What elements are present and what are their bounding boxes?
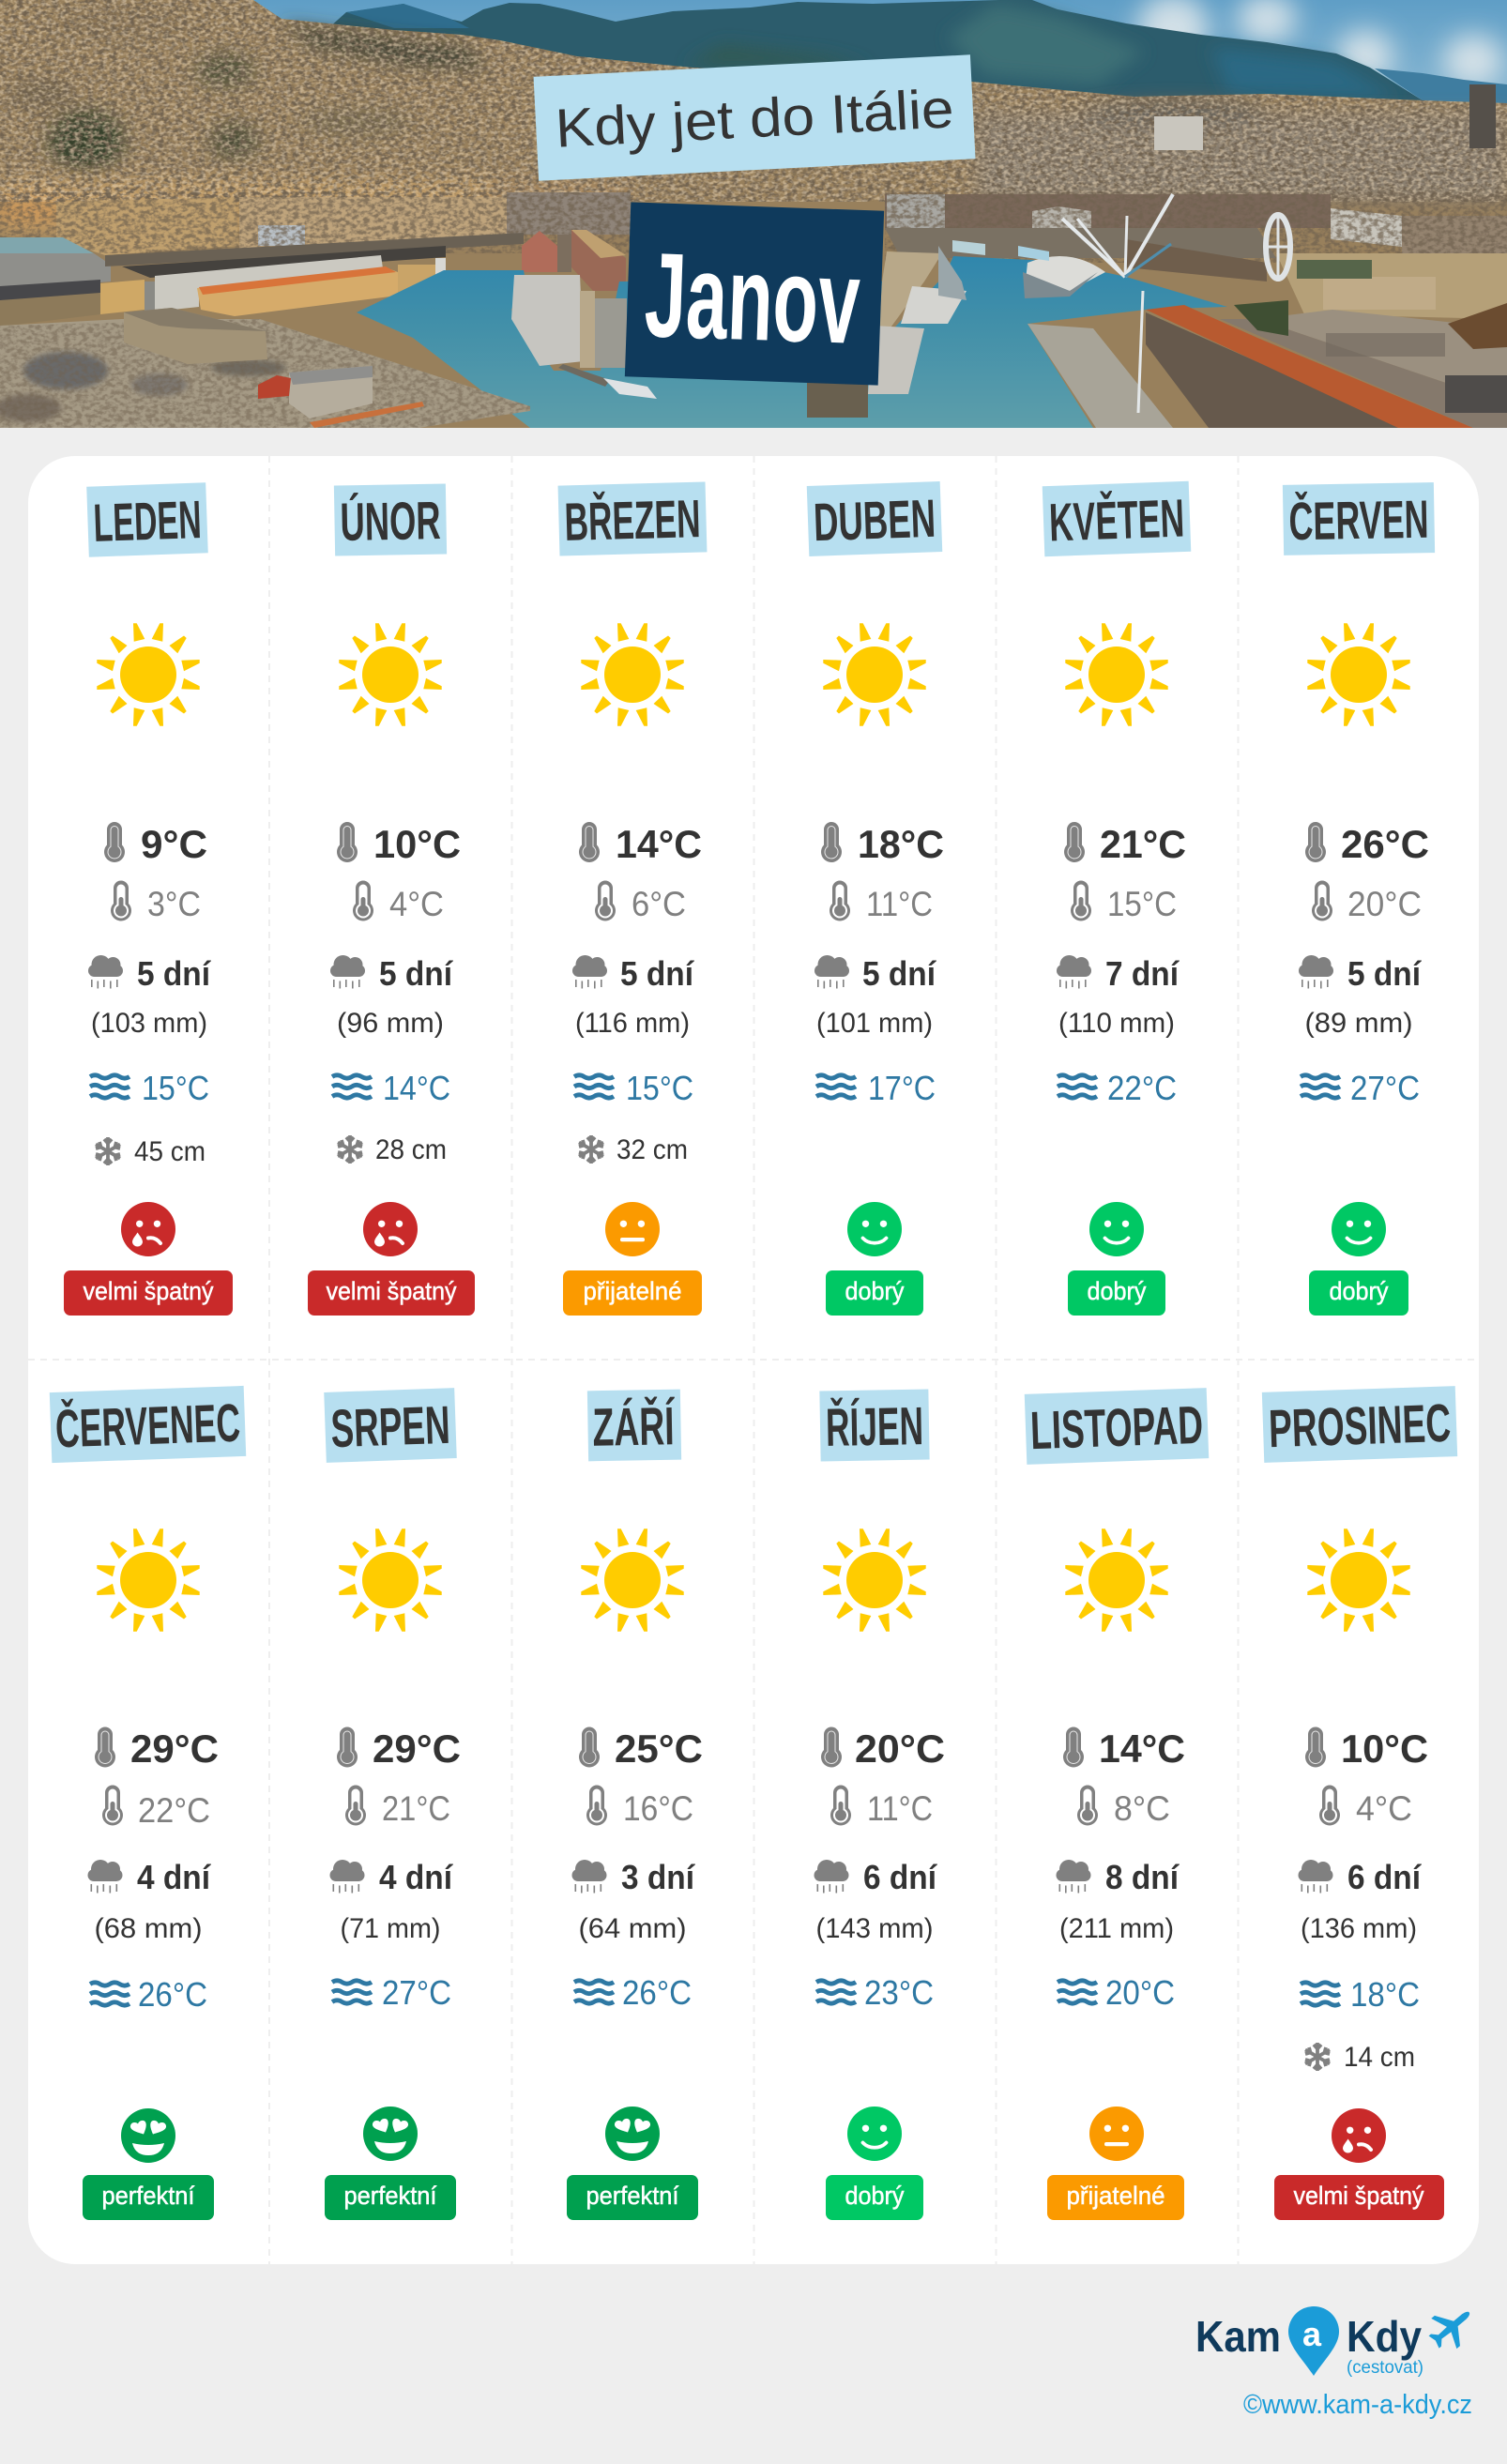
sea temperature: 26°C bbox=[622, 1973, 692, 2012]
panel: ČERVENEC bbox=[50, 1386, 246, 2220]
icon: max thermometer bbox=[1305, 1726, 1326, 1768]
rainfall: (136 mm) bbox=[1301, 1913, 1417, 1944]
rating badge bbox=[1309, 1270, 1408, 1316]
icon: sun bbox=[823, 1529, 926, 1632]
min temperature: 16°C bbox=[623, 1789, 693, 1828]
month heading: ÚNOR bbox=[340, 491, 441, 553]
sea temperature: 22°C bbox=[1107, 1069, 1177, 1107]
snow depth: 45 cm bbox=[134, 1136, 206, 1167]
rating badge: dobrý bbox=[1087, 1277, 1147, 1305]
icon: rain cloud bbox=[814, 955, 849, 989]
city texture bbox=[0, 0, 1507, 202]
rain days: 4 dní bbox=[137, 1858, 211, 1896]
icon: sea waves bbox=[1301, 1983, 1340, 2005]
panel: BŘEZEN bbox=[558, 481, 707, 1316]
icon: max thermometer bbox=[1064, 822, 1085, 862]
icon: sea waves bbox=[1058, 1981, 1097, 2003]
tall office block bbox=[1154, 116, 1203, 150]
rating badge bbox=[1047, 2175, 1184, 2220]
icon: min thermometer bbox=[353, 880, 373, 921]
rain days: 5 dní bbox=[620, 954, 694, 993]
min temperature: 6°C bbox=[632, 885, 686, 923]
icon: sun bbox=[1307, 1529, 1410, 1632]
icon: rain cloud bbox=[1057, 1860, 1090, 1894]
rating badge bbox=[826, 1270, 923, 1316]
month heading: DUBEN bbox=[813, 489, 936, 553]
long white building bbox=[155, 255, 383, 312]
max temperature: 18°C bbox=[858, 822, 944, 866]
month heading: KVĚTEN bbox=[1048, 488, 1185, 553]
icon: min thermometer bbox=[586, 1785, 607, 1826]
icon: happy face bbox=[1089, 1202, 1144, 1256]
rating badge: perfektní bbox=[586, 2182, 679, 2210]
rainfall: (68 mm) bbox=[94, 1913, 203, 1944]
icon: min thermometer bbox=[111, 880, 131, 921]
logo letter a: a bbox=[1302, 2315, 1322, 2353]
min temperature: 4°C bbox=[1356, 1789, 1412, 1828]
icon: rain cloud bbox=[330, 1860, 364, 1894]
icon: snowflake bbox=[338, 1135, 362, 1164]
sea temperature: 17°C bbox=[868, 1069, 936, 1107]
rain days: 4 dní bbox=[379, 1858, 453, 1896]
max temperature: 10°C bbox=[373, 822, 461, 866]
rainfall: (96 mm) bbox=[337, 1008, 444, 1039]
title banner: Kdy jet do Itálie: Kdy jet do Itálie bbox=[554, 78, 955, 160]
icon: sea waves bbox=[816, 1075, 856, 1098]
snow depth: 14 cm bbox=[1344, 2042, 1415, 2073]
rainfall: (211 mm) bbox=[1059, 1913, 1174, 1944]
icon: max thermometer bbox=[821, 822, 842, 862]
city bbox=[0, 0, 1507, 428]
icon: sun bbox=[97, 623, 200, 726]
icon: sun bbox=[823, 623, 926, 726]
rainfall: (110 mm) bbox=[1058, 1008, 1175, 1039]
rain days: 5 dní bbox=[379, 954, 453, 993]
rainfall: (101 mm) bbox=[816, 1008, 933, 1039]
floating pier below banner bbox=[807, 383, 868, 418]
yachts right marina bbox=[1028, 324, 1173, 428]
rating badge bbox=[83, 2175, 214, 2220]
rating badge bbox=[325, 2175, 456, 2220]
rating badge bbox=[567, 2175, 698, 2220]
mid-right buildings bbox=[1276, 253, 1507, 319]
icon: sad face bbox=[1332, 2108, 1386, 2163]
historic harbour buildings bbox=[522, 231, 557, 272]
rainfall: (64 mm) bbox=[578, 1913, 687, 1944]
rain days: 3 dní bbox=[621, 1858, 695, 1896]
month heading: ŘÍJEN bbox=[825, 1395, 924, 1458]
panel: DUBEN bbox=[807, 481, 944, 1316]
rating badge bbox=[308, 1270, 475, 1316]
icon: max thermometer bbox=[1063, 1726, 1084, 1768]
icon: map pin bbox=[1288, 2306, 1339, 2376]
icon: snowflake bbox=[1305, 2043, 1330, 2071]
icon: snowflake bbox=[579, 1135, 603, 1164]
orange-roofed warehouse bbox=[197, 267, 398, 316]
min temperature: 21°C bbox=[382, 1789, 450, 1828]
glass roof and grey complex bbox=[0, 237, 94, 253]
Bigo dome bbox=[1025, 256, 1105, 291]
icon: sea waves bbox=[332, 1075, 372, 1098]
rain days: 5 dní bbox=[862, 954, 936, 993]
sea temperature: 27°C bbox=[1350, 1069, 1420, 1107]
icon: rain cloud bbox=[1299, 1860, 1332, 1894]
month heading bbox=[1043, 481, 1191, 556]
icon: min thermometer bbox=[345, 1785, 366, 1826]
palazzo with red roof bbox=[1146, 312, 1398, 428]
rain days: 6 dní bbox=[863, 1858, 937, 1896]
icon: sun bbox=[581, 1529, 684, 1632]
icon: rain cloud bbox=[330, 955, 365, 989]
month heading: SRPEN bbox=[329, 1395, 451, 1459]
rating badge: přijatelné bbox=[584, 1277, 681, 1305]
month heading bbox=[1283, 482, 1435, 555]
icon: sea waves bbox=[574, 1075, 614, 1098]
small building and white tower bbox=[398, 265, 435, 293]
min temperature: 8°C bbox=[1114, 1789, 1170, 1828]
icon: heart-eyes face bbox=[363, 2107, 418, 2161]
logo: Kam a Kdy bbox=[1195, 2297, 1482, 2378]
icon: neutral face bbox=[605, 1202, 660, 1256]
east roofs bbox=[1257, 310, 1507, 403]
city tone patches bbox=[0, 7, 1507, 235]
icon: max thermometer bbox=[337, 1726, 358, 1768]
rating badge: velmi špatný bbox=[83, 1277, 214, 1305]
sea temperature: 14°C bbox=[383, 1069, 450, 1107]
concrete building bbox=[124, 308, 267, 364]
icon: happy face bbox=[1332, 1202, 1386, 1256]
icon: sun bbox=[581, 623, 684, 726]
rating badge: dobrý bbox=[845, 2182, 905, 2210]
rating badge: velmi špatný bbox=[327, 1277, 457, 1305]
snow depth: 28 cm bbox=[375, 1134, 447, 1165]
sea temperature: 15°C bbox=[626, 1069, 693, 1107]
max temperature: 14°C bbox=[616, 822, 702, 866]
icon: sea waves bbox=[816, 1981, 856, 2003]
icon: sea waves bbox=[90, 1983, 129, 2005]
icon: max thermometer bbox=[104, 822, 125, 862]
max temperature: 29°C bbox=[130, 1726, 219, 1771]
rating badge: perfektní bbox=[101, 2182, 195, 2210]
month heading bbox=[819, 1389, 930, 1462]
icon: min thermometer bbox=[1319, 1785, 1340, 1826]
panel: LEDEN bbox=[64, 482, 233, 1316]
city banner: Janov bbox=[625, 202, 884, 386]
panel: ČERVEN bbox=[1283, 482, 1435, 1316]
icon: sea waves bbox=[1301, 1075, 1340, 1098]
icon: max thermometer bbox=[579, 1726, 600, 1768]
rainfall: (71 mm) bbox=[340, 1913, 441, 1944]
max temperature: 26°C bbox=[1341, 822, 1429, 866]
rating badge: dobrý bbox=[1329, 1277, 1389, 1305]
icon: max thermometer bbox=[337, 822, 358, 862]
hero photo: Genoa harbour bbox=[0, 0, 1507, 428]
month heading bbox=[587, 1390, 681, 1461]
icon: heart-eyes face bbox=[121, 2108, 175, 2163]
rating badge bbox=[826, 2175, 923, 2220]
website credit: ©www.kam-a-kdy.cz bbox=[1243, 2390, 1472, 2420]
icon: neutral face bbox=[1089, 2107, 1144, 2161]
icon: min thermometer bbox=[830, 880, 850, 921]
icon: sea waves bbox=[90, 1075, 129, 1098]
icon: airplane bbox=[1422, 2297, 1482, 2357]
icon: rain cloud bbox=[1299, 955, 1333, 989]
icon: max thermometer bbox=[821, 1726, 842, 1768]
min temperature: 20°C bbox=[1347, 885, 1422, 923]
month heading bbox=[1025, 1388, 1209, 1465]
mid-band texture bbox=[0, 192, 1507, 263]
icon: sun bbox=[1065, 1529, 1168, 1632]
sea temperature: 20°C bbox=[1105, 1973, 1175, 2012]
road along the waterfront bbox=[105, 233, 524, 266]
min temperature: 4°C bbox=[389, 885, 444, 923]
max temperature: 9°C bbox=[141, 822, 207, 866]
yachts central pier bbox=[511, 275, 584, 366]
city banner: Janov: Janov bbox=[643, 228, 862, 370]
ferris wheel bbox=[1266, 215, 1290, 281]
icon: min thermometer bbox=[102, 1785, 123, 1826]
mountains bbox=[333, 0, 1423, 100]
max temperature: 29°C bbox=[373, 1726, 461, 1771]
month heading bbox=[807, 481, 942, 556]
icon: max thermometer bbox=[95, 1726, 115, 1768]
rain days: 7 dní bbox=[1105, 954, 1180, 993]
landmark tower bbox=[1469, 84, 1496, 148]
panel: KVĚTEN bbox=[1043, 481, 1191, 1316]
month heading: ZÁŘÍ bbox=[592, 1395, 676, 1458]
month heading: ČERVENEC bbox=[54, 1392, 241, 1459]
min temperature: 3°C bbox=[147, 885, 201, 923]
panel: SRPEN bbox=[324, 1388, 461, 2220]
month heading: LEDEN bbox=[92, 490, 203, 554]
sea temperature: 27°C bbox=[382, 1973, 451, 2012]
port yard bbox=[0, 319, 530, 428]
icon: rain cloud bbox=[88, 1860, 122, 1894]
logo word Kdy: Kdy bbox=[1347, 2312, 1422, 2361]
month heading bbox=[334, 483, 447, 556]
panel: PROSINEC bbox=[1262, 1386, 1457, 2220]
icon: sea waves bbox=[574, 1981, 614, 2003]
max temperature: 20°C bbox=[855, 1726, 945, 1771]
month heading: ČERVEN bbox=[1288, 489, 1429, 552]
icon: min thermometer bbox=[1071, 880, 1091, 921]
rain days: 8 dní bbox=[1105, 1858, 1180, 1896]
min temperature: 11°C bbox=[866, 885, 933, 923]
rainfall: (116 mm) bbox=[575, 1008, 690, 1039]
max temperature: 25°C bbox=[615, 1726, 703, 1771]
icon: rain cloud bbox=[88, 955, 123, 989]
icon: rain cloud bbox=[572, 955, 607, 989]
max temperature: 10°C bbox=[1341, 1726, 1428, 1771]
rating badge bbox=[64, 1270, 233, 1316]
icon: rain cloud bbox=[1057, 955, 1091, 989]
panel: ŘÍJEN bbox=[814, 1389, 945, 2220]
rain days: 6 dní bbox=[1347, 1858, 1422, 1896]
rating badge: dobrý bbox=[845, 1277, 905, 1305]
month heading bbox=[324, 1388, 457, 1463]
icon: min thermometer bbox=[595, 880, 616, 921]
rating badge bbox=[563, 1270, 702, 1316]
icon: heart-eyes face bbox=[605, 2107, 660, 2161]
panel: months card bbox=[28, 456, 1479, 2264]
icon: max thermometer bbox=[579, 822, 600, 862]
sea temperature: 15°C bbox=[142, 1069, 209, 1107]
month heading bbox=[50, 1386, 246, 1463]
sea temperature: 23°C bbox=[864, 1973, 934, 2012]
title banner: Kdy jet do Itálie bbox=[534, 54, 976, 181]
rainfall: (103 mm) bbox=[91, 1008, 207, 1039]
left quay block row bbox=[56, 197, 239, 255]
icon: sun bbox=[97, 1529, 200, 1632]
icon: rain cloud bbox=[572, 1860, 606, 1894]
min temperature: 22°C bbox=[138, 1791, 210, 1830]
logo subtitle: (cestovat) bbox=[1347, 2358, 1423, 2378]
icon: max thermometer bbox=[1305, 822, 1326, 862]
icon: happy face bbox=[847, 2107, 902, 2161]
icon: sun bbox=[1065, 623, 1168, 726]
rainfall: (89 mm) bbox=[1304, 1008, 1413, 1039]
icon: sea waves bbox=[1058, 1075, 1097, 1098]
icon: min thermometer bbox=[1312, 880, 1332, 921]
min temperature: 15°C bbox=[1107, 885, 1177, 923]
rating badge: perfektní bbox=[343, 2182, 437, 2210]
icon: sun bbox=[339, 1529, 442, 1632]
moored boats on the quay bbox=[952, 240, 985, 255]
rating badge: přijatelné bbox=[1066, 2182, 1165, 2210]
white building with red roof bbox=[289, 366, 373, 418]
month heading bbox=[86, 482, 208, 557]
rain days: 5 dní bbox=[137, 954, 211, 993]
rainfall: (143 mm) bbox=[816, 1913, 933, 1944]
rating badge: velmi špatný bbox=[1293, 2182, 1424, 2210]
icon: sun bbox=[1307, 623, 1410, 726]
rating badge bbox=[1068, 1270, 1165, 1316]
moored superyacht bbox=[603, 378, 657, 399]
icon: rain cloud bbox=[814, 1860, 848, 1894]
water bbox=[357, 256, 1227, 428]
trees bbox=[1234, 300, 1288, 336]
logo word Kam: Kam bbox=[1195, 2312, 1281, 2361]
sea temperature: 26°C bbox=[138, 1975, 207, 2014]
min temperature: 11°C bbox=[867, 1789, 933, 1828]
panel: ÚNOR bbox=[308, 483, 475, 1316]
sky bbox=[253, 0, 1507, 101]
max temperature: 21°C bbox=[1100, 822, 1186, 866]
right quay bbox=[885, 228, 1276, 258]
month heading bbox=[558, 481, 707, 556]
month heading: LISTOPAD bbox=[1029, 1395, 1204, 1461]
month heading: BŘEZEN bbox=[564, 488, 701, 553]
icon: min thermometer bbox=[830, 1785, 851, 1826]
Bigo crane bbox=[1062, 194, 1173, 413]
icon: sun bbox=[339, 623, 442, 726]
icon: sad face bbox=[363, 1202, 418, 1256]
rain days: 5 dní bbox=[1347, 954, 1422, 993]
icon: sad face bbox=[121, 1202, 175, 1256]
panel: LISTOPAD bbox=[1025, 1388, 1209, 2220]
rating badge bbox=[1274, 2175, 1444, 2220]
right city row bbox=[885, 194, 1331, 228]
icon: min thermometer bbox=[1077, 1785, 1098, 1826]
max temperature: 14°C bbox=[1099, 1726, 1185, 1771]
sea temperature: 18°C bbox=[1350, 1975, 1420, 2014]
icon: snowflake bbox=[96, 1137, 120, 1165]
panel: ZÁŘÍ bbox=[567, 1390, 703, 2220]
icon: happy face bbox=[847, 1202, 902, 1256]
snow depth: 32 cm bbox=[616, 1134, 688, 1165]
right pier and yachts bbox=[880, 251, 938, 327]
icon: sea waves bbox=[332, 1981, 372, 2003]
